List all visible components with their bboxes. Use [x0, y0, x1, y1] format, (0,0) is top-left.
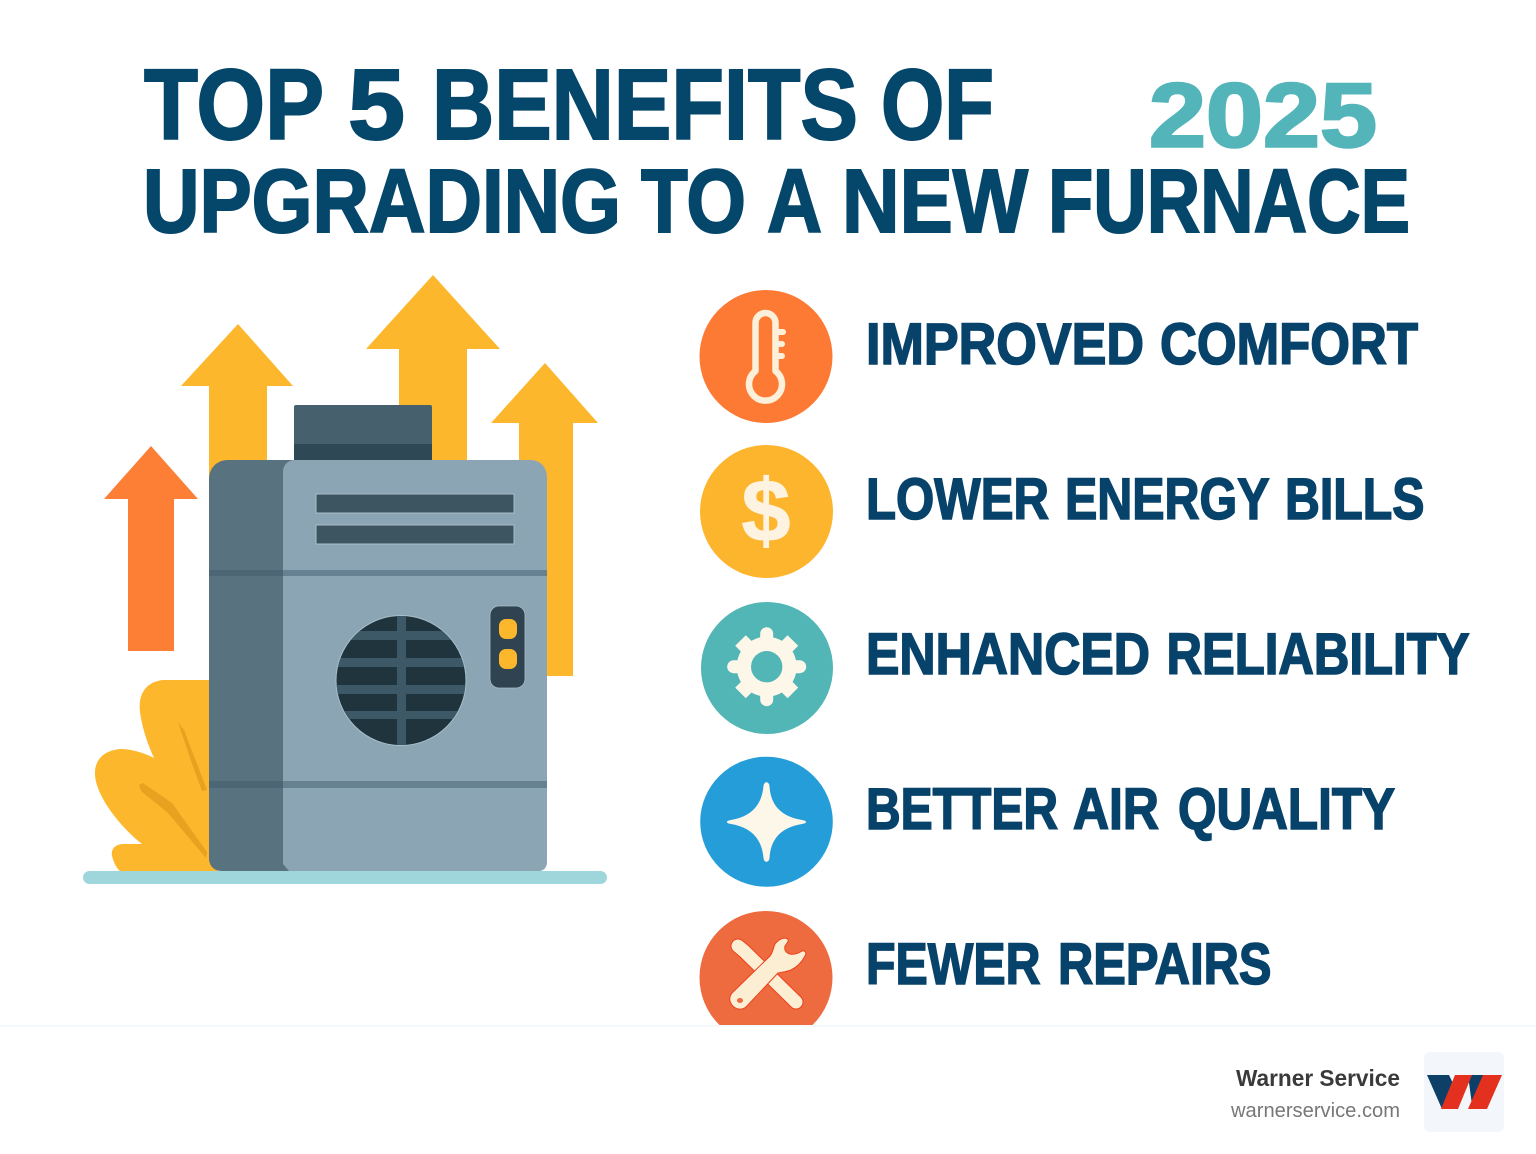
label: QUALITY	[1178, 777, 1395, 842]
icon: dollar	[700, 445, 833, 578]
label: FEWER	[866, 932, 1040, 997]
furnace body	[209, 460, 547, 871]
title: OF	[881, 49, 994, 161]
title: BENEFITS	[432, 49, 858, 161]
label: REPAIRS	[1058, 932, 1272, 997]
label	[866, 777, 1395, 842]
furnace top vent	[294, 405, 432, 461]
benefit 3: enhanced reliability	[701, 602, 1470, 734]
title: TO	[641, 152, 746, 252]
label: ENHANCED	[866, 622, 1150, 687]
arrow: orange	[104, 446, 198, 651]
label	[866, 622, 1470, 687]
label	[866, 467, 1424, 532]
footer logo	[1424, 1052, 1504, 1132]
arrow: yellow right	[491, 363, 598, 676]
arrow: yellow tall	[366, 275, 500, 470]
title: TOP	[144, 49, 324, 161]
leaf plant	[95, 680, 218, 871]
label	[866, 932, 1272, 997]
control panel	[490, 606, 525, 688]
label: BILLS	[1285, 467, 1424, 532]
footer bar	[0, 1025, 1536, 1154]
icon: gear	[701, 602, 833, 734]
title: A	[767, 152, 822, 252]
icon: dollar: $	[742, 461, 790, 560]
label: IMPROVED	[866, 312, 1144, 377]
title: FURNACE	[1048, 152, 1410, 252]
label	[866, 312, 1418, 377]
floor line	[83, 871, 607, 884]
icon: sparkle	[700, 757, 833, 887]
benefit 2: lower energy bills	[700, 445, 1424, 578]
label: COMFORT	[1160, 312, 1418, 377]
label: LOWER	[866, 467, 1049, 532]
label: BETTER	[866, 777, 1058, 842]
icon: thermometer	[700, 290, 832, 423]
footer url: warnerservice.com	[1230, 1100, 1400, 1122]
illustration: furnace with rising arrows	[83, 275, 607, 884]
label: ENERGY	[1065, 467, 1270, 532]
benefit 5: fewer repairs	[700, 911, 1272, 1044]
footer brand name: Warner Service	[1236, 1065, 1400, 1091]
benefit 4: better air quality	[700, 757, 1395, 887]
fan grille	[335, 615, 467, 747]
label: AIR	[1073, 777, 1159, 842]
label: RELIABILITY	[1166, 622, 1470, 687]
title	[143, 49, 1410, 252]
year badge: 2025	[1149, 66, 1377, 166]
arrow: yellow left	[181, 324, 293, 480]
icon: tools	[700, 911, 832, 1044]
benefit 1: improved comfort	[700, 290, 1418, 423]
title: UPGRADING	[143, 152, 621, 252]
top louvres	[316, 494, 514, 544]
title: NEW	[842, 152, 1028, 252]
title: 5	[348, 49, 405, 161]
